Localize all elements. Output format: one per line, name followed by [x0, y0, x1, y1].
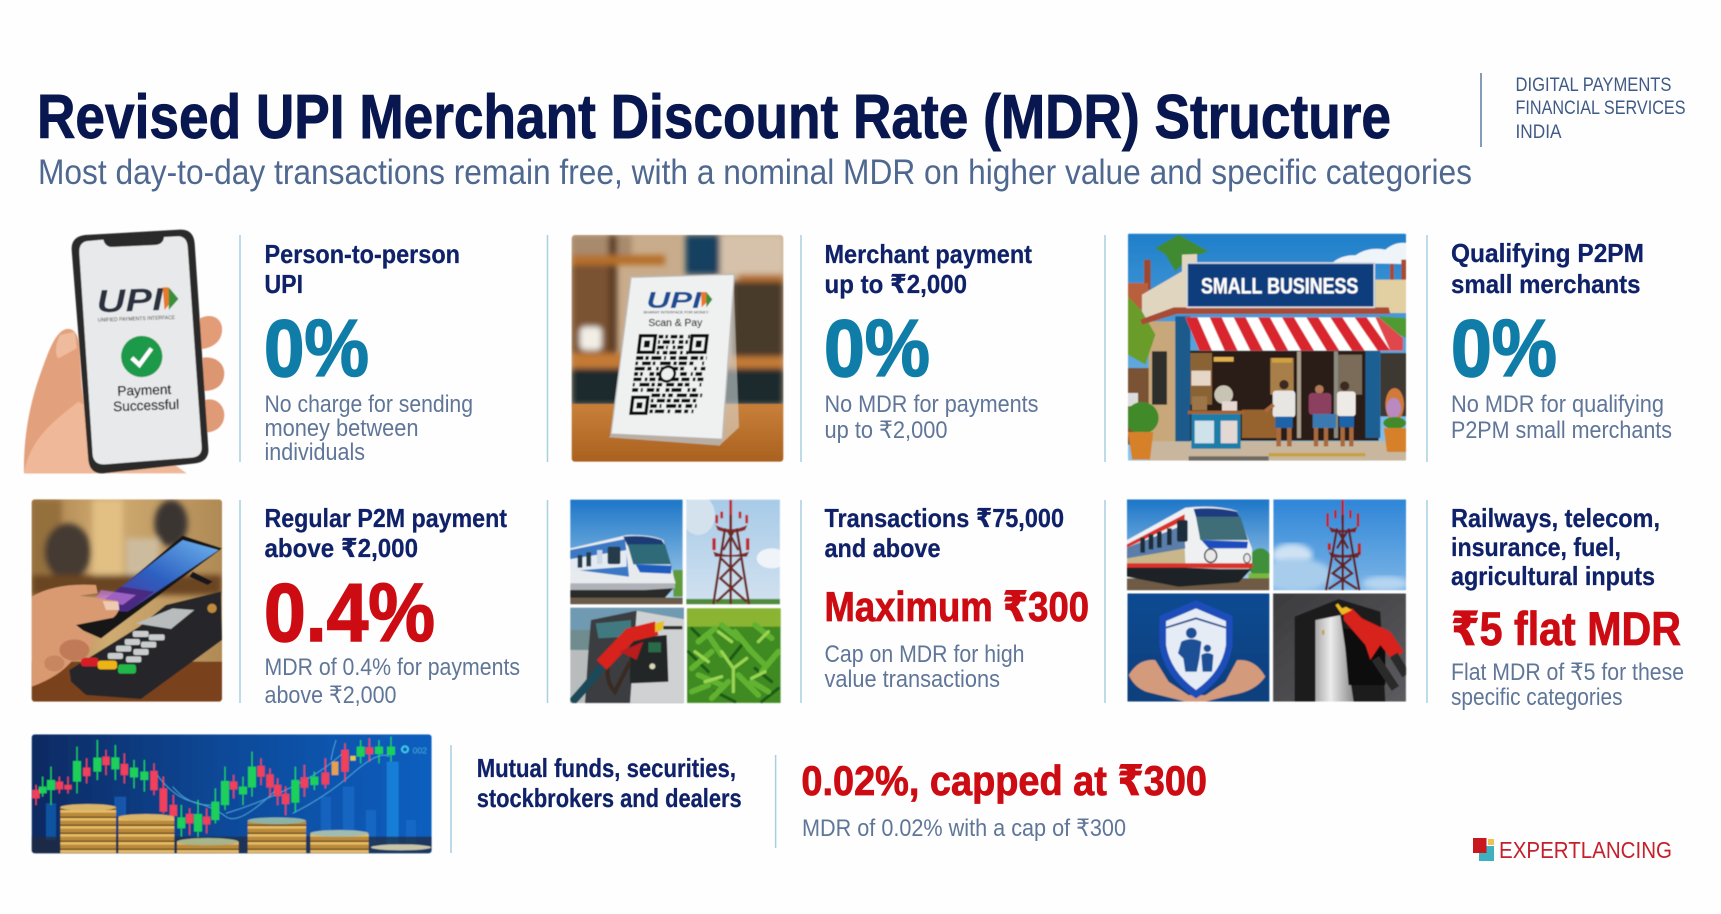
panel: qualifying P2PM small merchants: small merchants: [1451, 269, 1640, 299]
panel: transactions 75000 and above: Cap on MDR for high: [824, 641, 1024, 668]
panel: merchant payment up to 2000: up to ₹2,000: [824, 269, 967, 299]
logo: Expertlancing: EXPERTLANCING: [1499, 837, 1672, 863]
category tags: INDIA: [1516, 121, 1562, 143]
panel: person-to-person: [264, 239, 473, 466]
panel: railways, telecom, insurance, fuel, agricultural inputs: specific categories: [1451, 684, 1622, 711]
panel: railways, telecom, insurance, fuel, agricultural inputs: agricultural inputs: [1451, 561, 1655, 591]
panel: merchant payment up to 2000: [824, 239, 1038, 444]
panel: merchant payment up to 2000: up to ₹2,000: [824, 417, 948, 444]
image: candlestick chart with coin stacks: [32, 734, 432, 853]
panel: qualifying P2PM small merchants: 0%: [1451, 304, 1557, 394]
image: UPI scan and pay stand: BHARAT INTERFACE FOR MONEY: [644, 310, 710, 314]
panel: mutual funds rate: [801, 757, 1207, 842]
panel: mutual funds rate: 0.02%, capped at ₹300: [801, 757, 1207, 804]
panel: person-to-person: individuals: [264, 439, 365, 466]
panel: railways, telecom, insurance, fuel, agricultural inputs: ₹5 flat MDR: [1451, 602, 1681, 655]
panel: mutual funds heading: Mutual funds, securities,: [477, 753, 736, 783]
image: small business storefront: SMALL BUSINESS: [1201, 274, 1358, 299]
panel: person-to-person: 0%: [264, 304, 369, 394]
category tags: FINANCIAL SERVICES: [1516, 97, 1686, 119]
panel: qualifying P2PM small merchants: Qualifying P2PM: [1451, 238, 1644, 268]
panel: regular P2M above 2000: above ₹2,000: [264, 533, 418, 563]
image: hand holding phone showing payment successful: UNIFIED PAYMENTS INTERFACE: [98, 315, 176, 324]
panel: qualifying P2PM small merchants: No MDR for qualifying: [1451, 391, 1664, 418]
category tags: DIGITAL PAYMENTS: [1516, 74, 1672, 96]
image: collage of train, tower, fuel pump, crops: [570, 495, 787, 703]
category tags: [1481, 73, 1686, 147]
panel: transactions 75000 and above: Maximum ₹300: [824, 583, 1089, 630]
panel: person-to-person: No charge for sending: [264, 391, 473, 418]
title: Revised UPI Merchant Discount Rate (MDR) Structure: [37, 83, 1391, 152]
panel: qualifying P2PM small merchants: [1451, 238, 1672, 444]
panel: mutual funds rate: MDR of 0.02% with a cap of ₹300: [802, 815, 1126, 842]
panel: transactions 75000 and above: and above: [824, 533, 940, 563]
panel: regular P2M above 2000: above ₹2,000: [264, 682, 396, 709]
panel: transactions 75000 and above: value transactions: [824, 666, 1000, 693]
panel: mutual funds heading: stockbrokers and dealers: [477, 783, 742, 813]
panel: transactions 75000 and above: [824, 503, 1089, 693]
panel: qualifying P2PM small merchants: P2PM small merchants: [1451, 417, 1672, 444]
panel: railways, telecom, insurance, fuel, agricultural inputs: Flat MDR of ₹5 for these: [1451, 659, 1684, 686]
panel: merchant payment up to 2000: 0%: [824, 304, 930, 394]
image: hand holding phone showing payment successful: Successful: [113, 397, 179, 414]
image: phone tapping POS terminal: [32, 499, 222, 702]
panel: regular P2M above 2000: MDR of 0.4% for payments: [264, 654, 520, 681]
panel: merchant payment up to 2000: Merchant payment: [824, 239, 1032, 269]
image: collage of train, tower, insurance shield, fuel nozzle: [1127, 500, 1409, 702]
image: hand holding phone showing payment successful: UPI: [96, 281, 165, 319]
panel: person-to-person: Person-to-person: [264, 239, 460, 269]
subtitle: Most day-to-day transactions remain free, with a nominal MDR on higher value and specific categories: [38, 153, 1472, 192]
panel: person-to-person: money between: [264, 415, 418, 442]
panel: regular P2M above 2000: Regular P2M payment: [264, 503, 507, 533]
image: UPI scan and pay stand: Scan & Pay: [648, 318, 703, 329]
panel: merchant payment up to 2000: No MDR for payments: [824, 391, 1038, 418]
image: hand holding phone showing payment successful: Payment: [117, 382, 172, 399]
image: UPI scan and pay stand: UPI: [646, 287, 702, 313]
panel: regular P2M above 2000: [264, 503, 520, 709]
panel: regular P2M above 2000: 0.4%: [264, 566, 435, 659]
panel: mutual funds heading: [477, 753, 742, 813]
panel: railways, telecom, insurance, fuel, agricultural inputs: insurance, fuel,: [1451, 532, 1621, 562]
image: candlestick chart with coin stacks: 002: [413, 745, 427, 755]
image: UPI scan and pay stand: [572, 235, 783, 462]
image: small business storefront: [1125, 234, 1406, 461]
panel: person-to-person: UPI: [264, 269, 303, 299]
panel: railways, telecom, insurance, fuel, agricultural inputs: Railways, telecom,: [1451, 503, 1660, 533]
image: hand holding phone showing payment successful: [24, 230, 224, 473]
panel: railways, telecom, insurance, fuel, agricultural inputs: [1451, 503, 1684, 711]
panel: transactions 75000 and above: Transactions ₹75,000: [824, 503, 1064, 533]
